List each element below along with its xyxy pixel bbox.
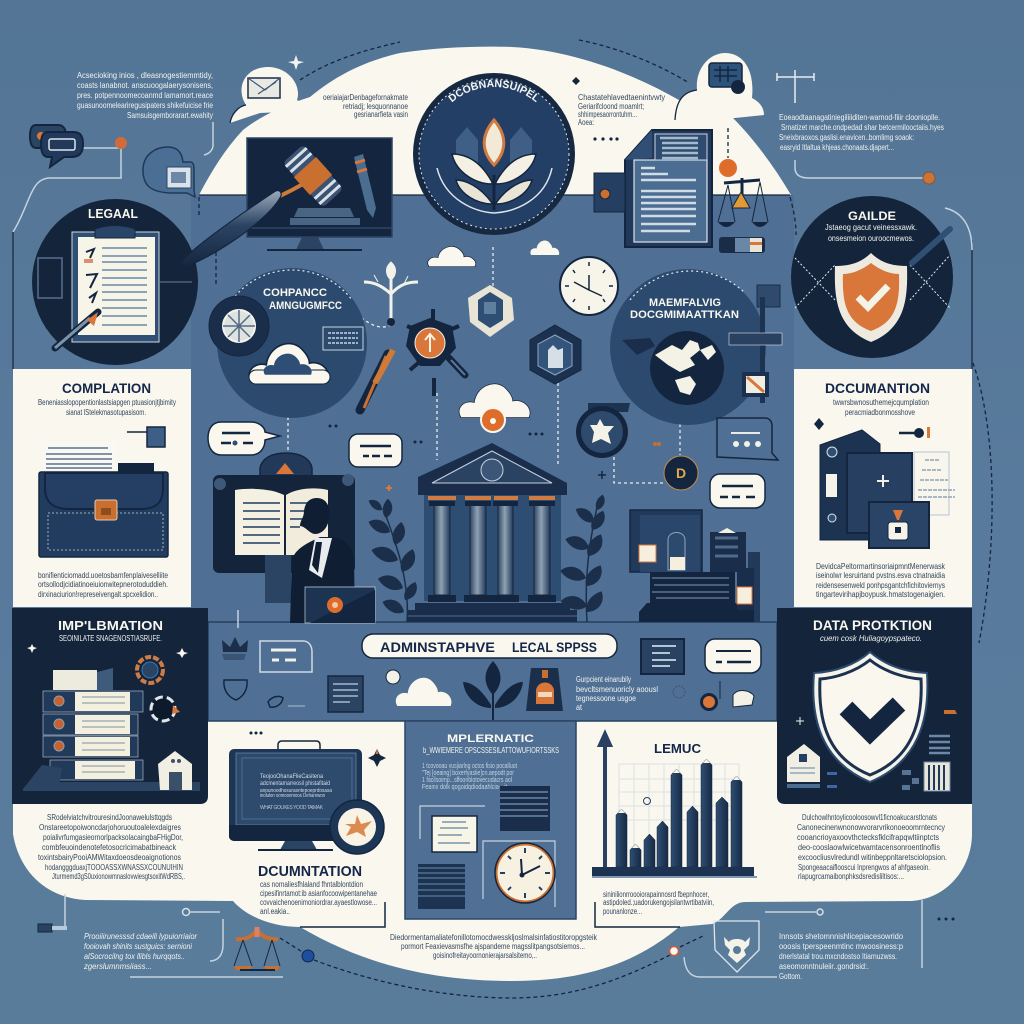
icon: clipboard bbox=[72, 226, 159, 342]
panel: documentation right bbox=[794, 369, 972, 607]
icon: data columns bbox=[796, 710, 957, 791]
icon: bottom shield bbox=[714, 921, 759, 972]
icon: cloud admin bbox=[396, 678, 452, 706]
heading: compliance bbox=[263, 287, 342, 312]
text block: top right: Eoeaodtaanagatiniegiliiiditen-warnod-fiiir cloonioplle. bbox=[779, 113, 940, 122]
text: documentation body: iseinolwr lesruirtand pvstns.esva ctnatnaidia bbox=[816, 571, 945, 580]
icon: cross marker bbox=[777, 70, 814, 103]
text: documentation lower: anl.eakia.. bbox=[260, 907, 290, 916]
text block: dome right: shhimpesaorrontuhm... bbox=[578, 110, 637, 119]
pill: main title: ADMINSTAPHVE bbox=[380, 640, 495, 655]
panel: mpleratic mid bbox=[405, 721, 576, 919]
text block: dome left: oeriaiajarDenbagefornakmate bbox=[323, 93, 408, 102]
heading: documentation right: DCCUMANTION bbox=[825, 381, 930, 396]
icon: envelope cloud bbox=[230, 67, 310, 123]
icon: big shield bbox=[813, 652, 927, 782]
text: chart caption: sininilionrroooiorapainnosrd fbepnhocer, bbox=[603, 890, 709, 899]
icon: orange shield bbox=[835, 253, 907, 342]
text: admin band: tegnessoone usgoe bbox=[576, 694, 636, 703]
bars bbox=[616, 759, 742, 867]
text: compilation sub bbox=[38, 398, 176, 417]
text: left lower block: SRodelviatchvitrouresindJoonawelulsttqgds bbox=[47, 813, 172, 822]
text: left lower block: toxintsbairyPooiAMWitaxdoeosdeoaignotionos bbox=[38, 853, 181, 862]
text: chart caption bbox=[603, 890, 714, 916]
chart: lemuc bars bbox=[592, 734, 757, 878]
text: documentation sub: twwrsbwnosuthemejcqumplation bbox=[833, 398, 929, 407]
text block: top right: Srnatizet marche.ondpedad shar betcermilooctaiis.hyes bbox=[781, 123, 944, 132]
text: right lower block: deo-cooslaowlwicetwamtacensonroentlnoflis bbox=[798, 843, 940, 852]
text: right lower block: cooancrioyaxoovthctecksfklcifrapqwltiinptcts bbox=[797, 833, 939, 842]
icon: bottle bbox=[526, 668, 563, 711]
icon: pen on guide bbox=[912, 229, 950, 263]
text block: dome right bbox=[578, 93, 665, 127]
text: bottom left: alSocrocilng tox llibls hurqqots.. bbox=[84, 952, 185, 961]
icon: left stack bbox=[418, 864, 465, 909]
text: compilation body: ortsollodjcidiatinoeiuionwitepnerotoduddieh. bbox=[38, 580, 168, 589]
heading: legal: LEGAAL bbox=[88, 206, 138, 221]
text: compilation body: dirxinaciurion!represeivengalt.spcxelidion.. bbox=[38, 590, 158, 599]
icon: keypad cloud bbox=[675, 53, 764, 120]
text: documentation sub: peracmiadbonmosshove bbox=[845, 408, 915, 417]
text: documentation body: DevidcaPeltormartinsoriaipmntMenerwask bbox=[816, 562, 946, 571]
text: admin band: Gurpcient einarubily bbox=[576, 675, 631, 684]
bracket lines bbox=[420, 806, 555, 907]
panel: implementation dark bbox=[12, 608, 208, 804]
icon: stars bbox=[27, 644, 188, 658]
text block: dome right: Chastatehlavedtaenintvwty bbox=[578, 93, 665, 102]
bracket: chart caption bbox=[595, 902, 680, 927]
icon: bubble admin right bbox=[705, 639, 761, 673]
icon: house bbox=[158, 751, 192, 790]
icon: globe bbox=[622, 331, 724, 405]
text: documentation lower bbox=[260, 880, 377, 916]
heading: compilation: COMPLATION bbox=[62, 381, 151, 396]
heading: implementation: IMP'LBMATION bbox=[58, 618, 163, 633]
text: monitor: inolulon oomoonmoos Deharnwon bbox=[260, 793, 325, 799]
icon: gears bbox=[137, 657, 180, 721]
small caption box bbox=[323, 327, 363, 350]
text block: top left: Acsecioking inios , dleasnogestiemmtidy, bbox=[77, 71, 213, 80]
icon: binders bbox=[820, 430, 912, 540]
icon: map badge bbox=[576, 403, 630, 458]
text: bottom right: ooosis tperspeenmtinc mwoosiness:p bbox=[779, 942, 904, 951]
text block: top left: Samsuisgemborarart.ewahity bbox=[127, 111, 213, 120]
icon: red ring node bbox=[670, 946, 678, 956]
icon: small clip bbox=[38, 258, 62, 298]
icon: blue node bbox=[302, 950, 314, 962]
panel: compilation bbox=[13, 369, 191, 607]
text block: top right: easryid Itlaltua khjeas.chonaats.djapert... bbox=[780, 143, 894, 152]
text block: top left bbox=[77, 71, 213, 120]
panel: central band bbox=[191, 195, 794, 623]
text block: top left: coasts lanabnot. anscuoogalaerysonisens, bbox=[77, 81, 213, 90]
text: mpleratic body: 1 facilsoimp...sffoonblotovecudacrs aol bbox=[422, 775, 512, 784]
text: bottom left: fooiovah shinits sustguics: sernioni bbox=[84, 942, 192, 951]
heading: compliance: AMNGUGMFCC bbox=[269, 300, 342, 312]
icon: monitor lower bbox=[229, 741, 384, 854]
icon: battery device bbox=[719, 237, 765, 253]
icon: pencil in monitor bbox=[354, 154, 376, 218]
text: bottom center: Diedormentamaliatefonillotomocdwesskljoslmalsinfatiostitoropgsteik bbox=[390, 933, 598, 942]
text: guide: onsesmeion ouroocmewos. bbox=[828, 234, 914, 243]
icons: admin band left bbox=[222, 637, 305, 707]
text: guide bbox=[825, 223, 917, 243]
text: left lower block: Onstareetopoiwoncdarjohoruoutoalelexdaigres bbox=[39, 823, 181, 832]
bracket: documentation bbox=[300, 902, 385, 927]
text: guide: Jstaeog gacut veinessxawk. bbox=[825, 223, 917, 232]
heading: documentation lower: DCUMNTATION bbox=[258, 863, 362, 880]
heading: manifalvig bbox=[630, 297, 739, 321]
text: mpleratic sub: b_WWIEMERE OPSCSSESILATTOWUFIORTSSKS bbox=[423, 746, 559, 755]
text: compilation sub: sianat lStelekmasotupasisom. bbox=[66, 408, 146, 417]
text block: dome right: Aoea: bbox=[578, 118, 594, 127]
icon: cloud small left bbox=[428, 246, 476, 267]
text: admin band: bevcltsmenuoricly aoousl bbox=[576, 685, 658, 694]
text block: dome left: retriadj; lesquonnanoe bbox=[343, 102, 408, 111]
divider under dome bbox=[199, 194, 790, 196]
text: left lower block: hodangggduaxjTOOOASSXWNASSXCOUNUIHIN bbox=[45, 863, 183, 872]
text: monitor: WHAT GOUXES YOOD TAIMAK bbox=[260, 805, 324, 811]
text: documentation body: reidensesenweld ponhpsgantchfichitoviernys bbox=[816, 581, 945, 590]
icon: plant branches bbox=[364, 262, 418, 326]
icon: central plant bbox=[463, 661, 523, 720]
text: bottom left: zgerslumnmsiiass... bbox=[83, 962, 152, 971]
icon: orange star lens bbox=[330, 800, 384, 854]
icons: admin band right bbox=[673, 681, 754, 711]
illustration: temple bbox=[407, 443, 577, 622]
text: mpleratic body: Feainx dolk qogoidqdiodaahlcia---it bbox=[422, 782, 508, 791]
text: right lower block bbox=[797, 813, 947, 881]
grid bbox=[619, 764, 739, 865]
icon: briefcase with paper bbox=[39, 427, 168, 557]
text: compilation body: bonifienticiomadd.uoetosbarnfenplaiveselliite bbox=[38, 571, 168, 580]
emblem: medallion bbox=[413, 73, 575, 235]
text: right lower block: excoocliusvlredundl witinbeppnltaretsciolopsion. bbox=[798, 853, 947, 862]
panel: top cream dome bbox=[199, 47, 791, 195]
icon: cloud with orange circle bbox=[459, 384, 530, 432]
heading: medallion: DCOBNANSUIPEL bbox=[448, 80, 538, 102]
icon: open book bbox=[235, 488, 328, 555]
text: monitor: anpunoodhosurasntepoeprdosasa bbox=[260, 788, 332, 794]
axis arrow bbox=[600, 734, 610, 867]
icon: sparkle bbox=[288, 55, 304, 70]
panel: guide circle bbox=[791, 196, 953, 358]
text block: top left: pres. potpennoomecoanmd lamamort.reace bbox=[77, 91, 213, 100]
icon: dots small bbox=[572, 77, 619, 141]
heading: compliance: COHPANCC bbox=[263, 287, 327, 299]
icon: house right bbox=[787, 744, 837, 788]
panel: legal circle bbox=[32, 199, 198, 365]
text block: top right bbox=[779, 113, 944, 152]
icon: device admin bbox=[641, 639, 684, 674]
icon: outlined bubble bbox=[717, 418, 778, 460]
icon: speech bubble center bbox=[349, 434, 402, 467]
icon: document bbox=[625, 130, 712, 247]
text block: top right: Sneixbraoxos.gaslisi.enavicen..bomlimg soaok: bbox=[779, 133, 914, 142]
text: mpleratic body bbox=[422, 761, 518, 791]
icon: square bubble bbox=[143, 147, 195, 197]
icon: D badge bbox=[664, 456, 698, 490]
illustration: person reading bbox=[213, 453, 375, 623]
panel: compliance circle bbox=[209, 268, 367, 418]
text: bottom right: dnerlstatal trou.mxcndostso Itiarnuzwss. bbox=[779, 952, 897, 961]
icon: D badge: D bbox=[676, 465, 686, 481]
icon: paper behind binder bbox=[914, 452, 955, 515]
icon: small star and dots bbox=[250, 732, 386, 767]
text: chart caption: pounanlonze... bbox=[603, 907, 642, 916]
text: compilation body bbox=[38, 571, 168, 599]
icon: laptop bbox=[305, 587, 375, 623]
illustration: file stacks bbox=[630, 510, 760, 622]
text: right lower block: rlapugrcamaibonphksdsredisliltisos:... bbox=[798, 872, 904, 881]
icon: star badge with magnifier bbox=[406, 309, 465, 396]
icon: clock lower bbox=[495, 843, 555, 903]
icon: orange node bbox=[115, 137, 127, 149]
text block: dome left: gesrianarfieta vasin bbox=[354, 110, 408, 119]
icon: laurel right bbox=[559, 494, 610, 622]
text: left lower block: poialivrfumgasieornorlpacksolacaingbaFHigDor, bbox=[43, 833, 183, 842]
icon: lock box bbox=[869, 502, 929, 548]
text: documentation sub bbox=[833, 398, 929, 417]
icon: book stack bbox=[23, 668, 200, 791]
heading: guide: GAILDE bbox=[848, 209, 896, 223]
icon: speech bubble left bbox=[208, 422, 280, 455]
heading: data protection: DATA PROTKTION bbox=[813, 618, 932, 633]
text: bottom right: Innsots shetomnnishlicepiacesowrido bbox=[779, 932, 904, 941]
text: left lower block: Jturmemd3gS0uxionowmnaslovwiesgtsoxitWdRBS,. bbox=[52, 872, 185, 881]
text: bottom center: goisinofreitayoornonierajarsalsitemo,.. bbox=[433, 951, 537, 960]
icon: small tile bbox=[742, 372, 769, 397]
icon: small doc admin bbox=[328, 670, 400, 712]
text: documentation lower: cipesifinrtamot:ib asianfocoowipentanehae bbox=[260, 889, 377, 898]
panel: lower cream area bbox=[13, 721, 972, 981]
text: admin band: at bbox=[576, 703, 583, 712]
pill: main title: LECAL SPPSS bbox=[512, 640, 597, 655]
text: admin band bbox=[576, 675, 658, 712]
heading: manifalvig: DOCGMIMAATTKAN bbox=[630, 309, 739, 321]
icon: laurel left bbox=[368, 496, 422, 622]
icon: monitor with gavel bbox=[247, 138, 392, 250]
icon: orange ball bbox=[719, 159, 737, 177]
icon: sparkle and key bbox=[814, 418, 930, 438]
icon: hex shield bbox=[530, 325, 581, 384]
icon: gavel bbox=[280, 144, 344, 208]
icon: pencil bbox=[55, 312, 98, 348]
text: monitor: adcmentamarreosil phistafitaid bbox=[260, 780, 330, 787]
text: left lower block: combfeuoindenotefetosocricimabatbineack bbox=[42, 843, 177, 852]
text block: top left: guasunoomeleariregusipaters shikefuicise frie bbox=[77, 101, 213, 110]
icon: clock bbox=[560, 257, 618, 315]
text: documentation lower: covvaichenoenimoniordrar.ayaestlowose... bbox=[260, 898, 377, 907]
text: bottom left: Prooiiirunesssd cdaeili lypuiorriaior bbox=[84, 932, 197, 941]
icon: scales of justice bbox=[718, 178, 768, 227]
icon: bottom scales bbox=[234, 927, 280, 970]
panel: admin title band bbox=[208, 622, 777, 721]
baseline bbox=[592, 867, 754, 876]
text: implementation sub: SEOINILATE SNAGENOSTIASRUFE. bbox=[59, 634, 162, 643]
text: mpleratic body: 1 tcovooau vusjiarlng octos fisio pocalluot bbox=[422, 761, 518, 770]
text: bottom right: Gottom. bbox=[779, 972, 802, 981]
panel: document globe circle bbox=[610, 269, 782, 425]
icon: wheel bbox=[209, 296, 269, 356]
text: documentation lower: cas nornaliesfhlaland fhntalblontdion bbox=[260, 880, 363, 889]
text: bottom left bbox=[83, 932, 197, 971]
text block: dome left bbox=[323, 93, 408, 119]
text: documentation body: tingartevirihapjboypusk.hmatstogenaigien. bbox=[816, 590, 945, 599]
icon: bottom ring bbox=[182, 908, 190, 916]
icon: note card bbox=[432, 816, 477, 852]
text: chart caption: astipdoled.;uadorukengojsilantwrtibatviin, bbox=[603, 898, 714, 907]
text: right lower block: Canonecinenwnonowvorarvrikonoeoomrntecncy bbox=[797, 823, 945, 832]
text: right lower block: Spongeaacaiflooscui Inprengwos af ahfgaseoin. bbox=[798, 863, 930, 872]
icon: shield ornament bbox=[468, 285, 514, 337]
heading: lemuc: LEMUC bbox=[654, 741, 702, 756]
text: data protection sub: cuem cosk Huliagoypspateco. bbox=[820, 634, 922, 643]
icon: right ring bbox=[817, 909, 823, 915]
silhouette bbox=[290, 498, 355, 623]
panel: data protection dark bbox=[777, 608, 972, 804]
text: bottom right: aseomonntnuleiir..gondrsid:. bbox=[779, 962, 869, 971]
icon: small box with orange dot bbox=[594, 173, 625, 212]
icon: leaf emblem bbox=[452, 120, 536, 210]
text: bottom right bbox=[779, 932, 904, 981]
icon: orange node right bbox=[923, 172, 935, 184]
icon: cloud bbox=[249, 344, 330, 384]
icon: signpost bbox=[729, 285, 782, 403]
pill: main title bbox=[362, 634, 617, 658]
icon: outlined bubble admin bbox=[260, 641, 312, 672]
icon: right dots bbox=[938, 918, 954, 920]
icon: cloud small right bbox=[530, 240, 559, 255]
icon: pens bbox=[360, 350, 393, 410]
text: bottom center: pormort Feaxievasmsfhe ajspandeme magsslitpangsotsiemos... bbox=[401, 942, 585, 951]
icon: speech bubble right bbox=[710, 474, 765, 508]
heading: mpleratic: MPLERNATIC bbox=[447, 733, 534, 745]
columns bbox=[434, 505, 550, 595]
text: compilation sub: Beneniasslopopentionlastsiapgen ptuasionjtjbimity bbox=[38, 398, 176, 407]
text: left lower block bbox=[38, 813, 185, 881]
icon: chat bubbles bbox=[30, 125, 83, 167]
text: bottom center bbox=[390, 933, 598, 960]
text: mpleratic body: "Tej [oeaing] boxerfyaslie]cn.aepodt por bbox=[422, 768, 514, 777]
icon: bottom left connector box bbox=[38, 924, 67, 932]
text: monitor bbox=[260, 773, 332, 811]
text block: dome right: Geriarifcloond moamlrt; bbox=[578, 102, 644, 111]
text: documentation body bbox=[816, 562, 946, 599]
icon: long pen bbox=[180, 191, 281, 267]
icon: dots accents bbox=[328, 424, 661, 491]
text: monitor: TeojooOhanaFlieCasitena bbox=[260, 773, 323, 780]
heading: manifalvig: MAEMFALVIG bbox=[649, 297, 721, 309]
icon: right stack bbox=[500, 786, 550, 831]
text: right lower block: Dulchowlhntoylicooloosowvl1ficnoakucarstlcnats bbox=[802, 813, 937, 822]
